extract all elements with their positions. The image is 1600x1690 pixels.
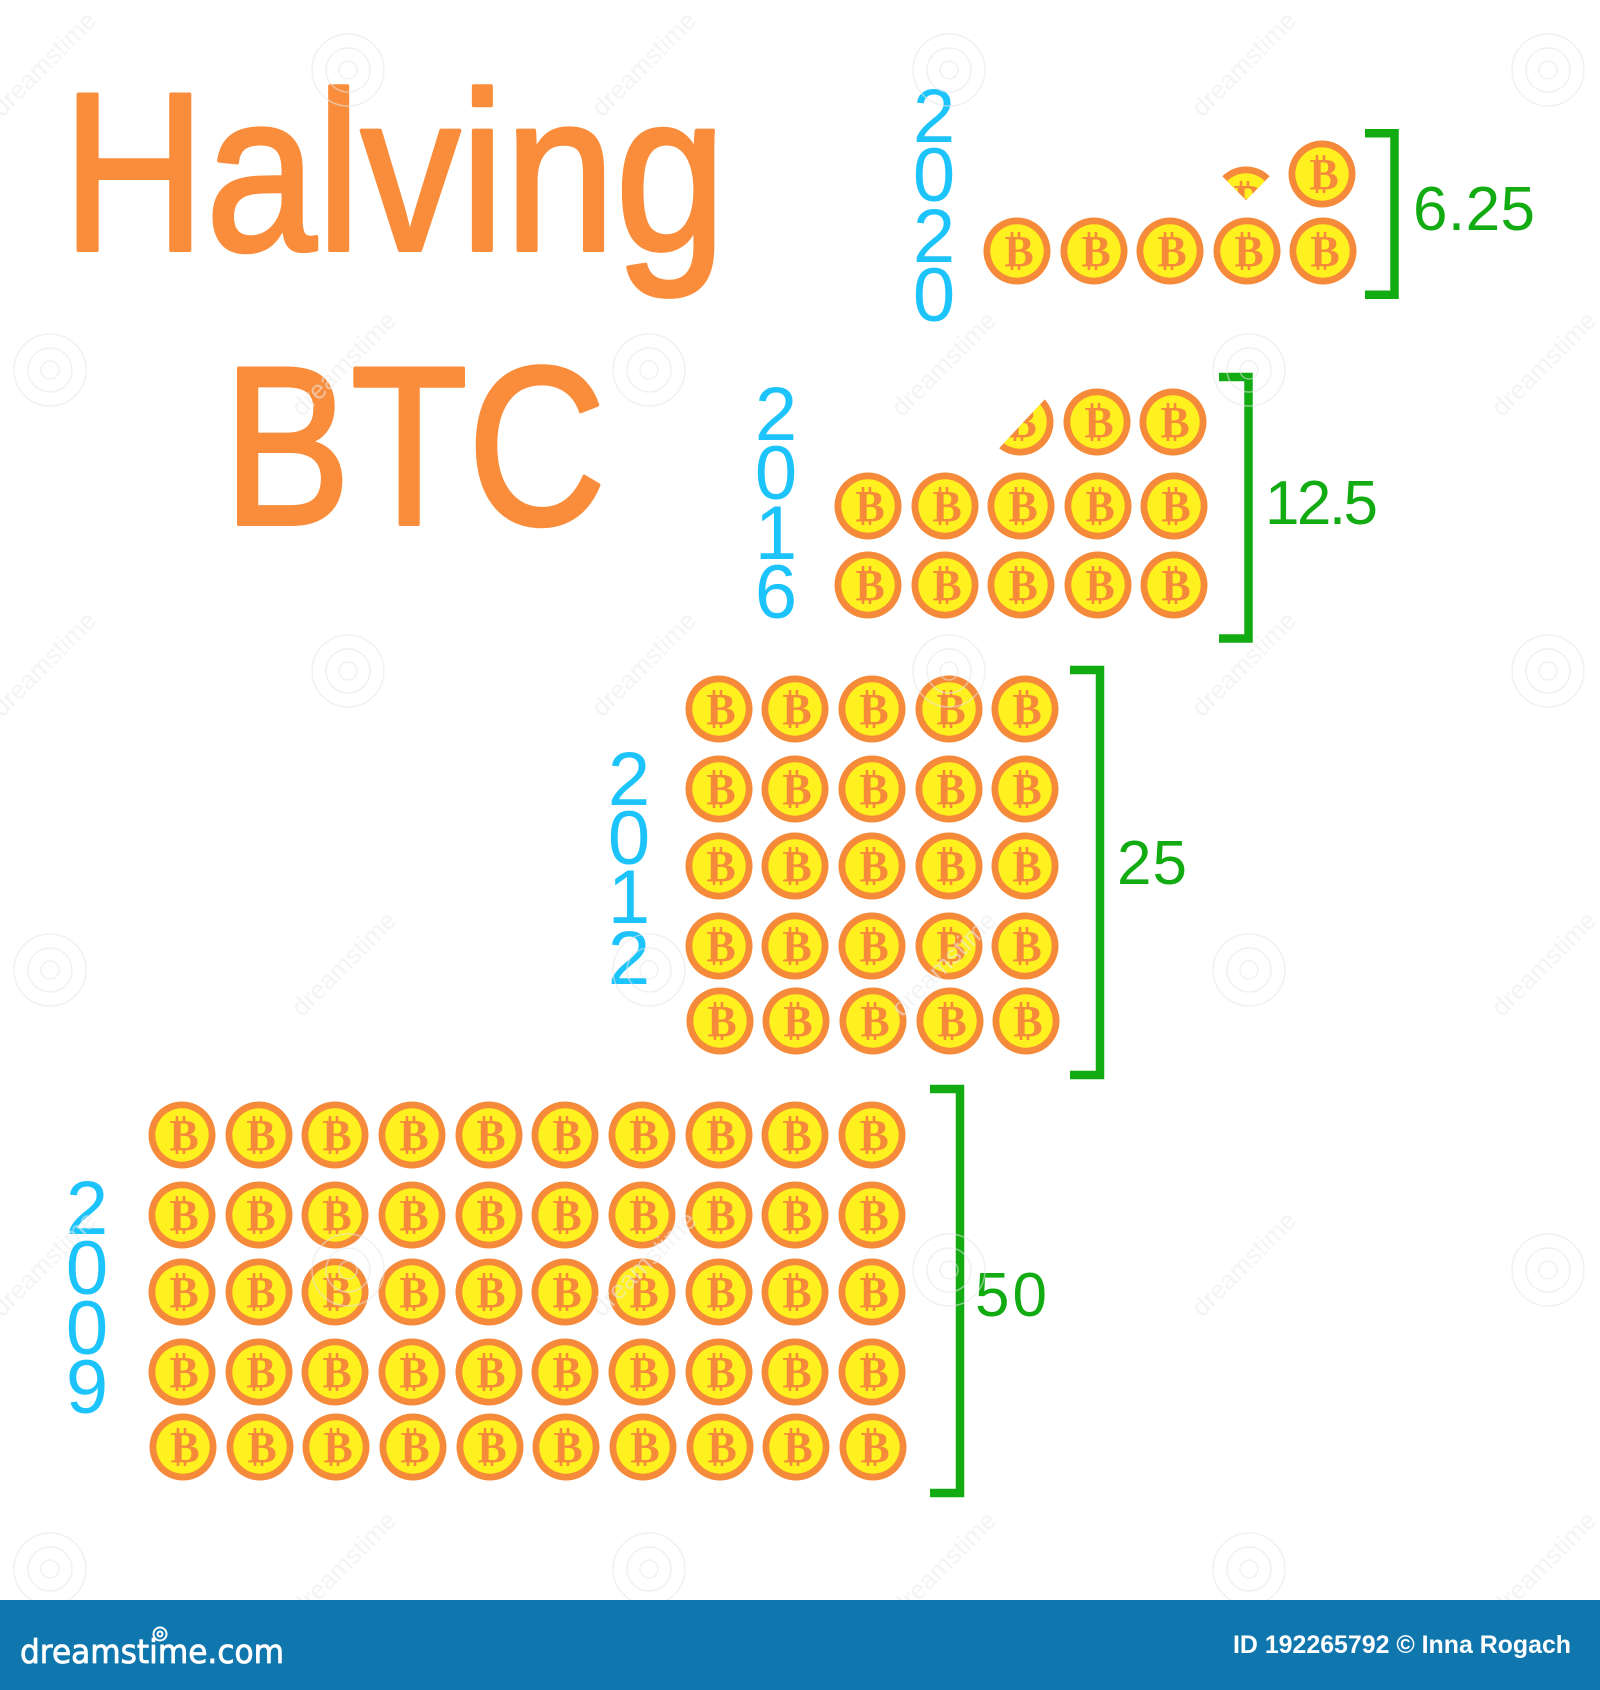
coin row 1: B: [399, 1111, 429, 1160]
top row coins with half coin: B: [1160, 398, 1190, 447]
coin row 3: B: [706, 1268, 736, 1317]
bottom row coins: B: [1008, 561, 1038, 610]
year label 2009: 9: [66, 1345, 108, 1430]
watermark layer: dreamstime: [585, 605, 702, 722]
icon: logo spiral: [154, 1628, 166, 1640]
year label 2012: [608, 737, 650, 1001]
coin row 2: B: [629, 1191, 659, 1240]
watermark layer: dreamstime: [1485, 905, 1600, 1022]
coin row 5: B: [783, 997, 813, 1046]
coin row 5: B: [247, 1423, 277, 1472]
coin row 2: B: [859, 765, 889, 814]
coin row 2: B: [1012, 765, 1042, 814]
coin row 1: B: [782, 685, 812, 734]
year label 2020: 0: [913, 133, 955, 218]
coin row 5: [686, 988, 1060, 1054]
coin row 4: B: [322, 1348, 352, 1397]
watermark layer: dreamstime: [1485, 305, 1600, 422]
footer bar: [0, 1600, 1600, 1690]
panel: 2016 halving: [755, 372, 1378, 638]
coin row 4: B: [246, 1348, 276, 1397]
coin row 5: B: [170, 1423, 200, 1472]
coin row 4: [686, 912, 1058, 980]
bottom row coins: [834, 552, 1208, 618]
coin row 2: B: [399, 1191, 429, 1240]
year label 2012: 2: [608, 737, 650, 822]
top row coins with quarter wedge: B: [1233, 176, 1263, 225]
bracket 2009: [930, 1089, 960, 1493]
coin row 5: B: [553, 1423, 583, 1472]
watermark layer: dreamstime: [1185, 1205, 1302, 1322]
coin row 2: B: [322, 1191, 352, 1240]
top row coins with quarter wedge: B: [1309, 150, 1339, 199]
bottom row coins: B: [1161, 561, 1191, 610]
coin row 4: B: [782, 922, 812, 971]
year label 2016: 6: [755, 550, 797, 635]
bottom row coins: B: [1004, 227, 1034, 276]
coin row 4: B: [936, 922, 966, 971]
coin row 2: B: [782, 1191, 812, 1240]
panel: 2009 halving: [66, 1089, 1047, 1493]
coin row 1: B: [629, 1111, 659, 1160]
year label 2020: 0: [913, 253, 955, 338]
year label 2009: [66, 1166, 108, 1430]
bracket 2016: [1219, 377, 1248, 638]
coin row 1: B: [246, 1111, 276, 1160]
coin row 4: B: [169, 1348, 199, 1397]
middle row coins: B: [1161, 482, 1191, 531]
coin row 3: B: [859, 1268, 889, 1317]
bottom row coins: B: [855, 561, 885, 610]
coin row 2: B: [782, 765, 812, 814]
coin row 3: B: [629, 1268, 659, 1317]
coin row 3: B: [936, 842, 966, 891]
coin row 3: B: [859, 842, 889, 891]
coin row 1: B: [322, 1111, 352, 1160]
watermark layer: dreamstime: [285, 1505, 402, 1622]
year label 2016: 1: [755, 491, 797, 576]
watermark layer: dreamstime: [885, 1505, 1002, 1622]
watermark layer: dreamstime: [1485, 1505, 1600, 1622]
coin row 2: B: [476, 1191, 506, 1240]
coin row 4: B: [859, 1348, 889, 1397]
coin row 4: B: [706, 922, 736, 971]
coin row 2: B: [552, 1191, 582, 1240]
coin row 1: B: [169, 1111, 199, 1160]
top row coins with half coin: [986, 388, 1206, 456]
watermark layer: dreamstime: [1185, 605, 1302, 722]
coin row 4: B: [782, 1348, 812, 1397]
coin row 5: B: [400, 1423, 430, 1472]
coin row 3: B: [782, 842, 812, 891]
watermark layer: dreamstime: [285, 305, 402, 422]
coin row 3: [686, 832, 1058, 900]
year label 2016: 0: [755, 431, 797, 516]
year label 2012: 1: [608, 855, 650, 940]
watermark layer: dreamstime: [585, 5, 702, 122]
watermark layer: dreamstime: [285, 905, 402, 1022]
coin row 4: B: [859, 922, 889, 971]
coin row 2: [686, 756, 1058, 822]
footer logo: dreamstime.com: dreamstime.com: [20, 1632, 284, 1671]
bracket 2012: [1070, 670, 1100, 1075]
coin row 3: B: [706, 842, 736, 891]
coin row 1: B: [706, 1111, 736, 1160]
watermark layer: dreamstime: [885, 905, 1002, 1022]
bottom row coins: B: [932, 561, 962, 610]
coin row 5: B: [1013, 997, 1043, 1046]
coin row 3: B: [322, 1268, 352, 1317]
bracket 2020: [1365, 133, 1394, 295]
coin row 5: B: [707, 997, 737, 1046]
top row coins with half coin: B: [1007, 398, 1037, 447]
middle row coins: B: [1008, 482, 1038, 531]
value 25: 25: [1117, 829, 1187, 898]
coin row 2: B: [936, 765, 966, 814]
coin row 2: B: [706, 1191, 736, 1240]
panel: 2012 halving: [608, 670, 1187, 1075]
year label 2020: 2: [913, 194, 955, 279]
coin row 5: B: [937, 997, 967, 1046]
coin row 3: B: [782, 1268, 812, 1317]
middle row coins: B: [1085, 482, 1115, 531]
value 6.25: 6.25: [1413, 175, 1535, 244]
top row coins with quarter wedge: [1222, 140, 1356, 208]
coin row 2: B: [169, 1191, 199, 1240]
watermark layer: dreamstime: [585, 1205, 702, 1322]
coin row 4: B: [1012, 922, 1042, 971]
coin row 3: B: [246, 1268, 276, 1317]
bottom row coins: B: [1157, 227, 1187, 276]
watermark layer: dreamstime: [885, 305, 1002, 422]
year label 2016: 2: [755, 372, 797, 457]
coin row 1: B: [1012, 685, 1042, 734]
coin row 3: B: [1012, 842, 1042, 891]
footer credit: ID 192265792 © Inna Rogach: [1233, 1631, 1571, 1659]
coin row 5: B: [860, 997, 890, 1046]
coin row 1: B: [782, 1111, 812, 1160]
middle row coins: [834, 472, 1208, 540]
coin row 1: B: [859, 1111, 889, 1160]
middle row coins: B: [932, 482, 962, 531]
year label 2012: 0: [608, 796, 650, 881]
bottom row coins: B: [1310, 227, 1340, 276]
year label 2012: 2: [608, 916, 650, 1001]
bottom row coins: [984, 218, 1356, 284]
coin row 1: B: [552, 1111, 582, 1160]
coin row 4: B: [706, 1348, 736, 1397]
coin row 1: B: [706, 685, 736, 734]
year label 2009: 2: [66, 1166, 108, 1251]
coin row 1: [686, 676, 1058, 742]
coin row 3: [148, 1258, 906, 1326]
bottom row coins: B: [1085, 561, 1115, 610]
year label 2009: 0: [66, 1286, 108, 1371]
coin row 4: B: [476, 1348, 506, 1397]
value 50: 50: [975, 1261, 1047, 1330]
coin row 4: B: [552, 1348, 582, 1397]
coin row 3: B: [552, 1268, 582, 1317]
coin row 5: B: [707, 1423, 737, 1472]
year label 2016: [755, 372, 797, 635]
coin row 2: B: [246, 1191, 276, 1240]
coin row 2: B: [706, 765, 736, 814]
coin row 1: B: [859, 685, 889, 734]
year label 2020: [913, 74, 955, 338]
coin row 5: B: [323, 1423, 353, 1472]
title: Halving: Halving: [62, 45, 726, 298]
title: BTC: BTC: [223, 319, 606, 572]
coin row 5: B: [783, 1423, 813, 1472]
coin row 3: B: [476, 1268, 506, 1317]
middle row coins: B: [855, 482, 885, 531]
watermark layer: dreamstime: [1185, 5, 1302, 122]
bottom row coins: B: [1081, 227, 1111, 276]
coin row 3: B: [399, 1268, 429, 1317]
top row coins with half coin: B: [1084, 398, 1114, 447]
coin row 5: [150, 1414, 906, 1480]
year label 2020: 2: [913, 74, 955, 159]
coin row 5: B: [860, 1423, 890, 1472]
coin row 5: B: [477, 1423, 507, 1472]
value 12.5: 12.5: [1265, 469, 1378, 538]
year label 2009: 0: [66, 1226, 108, 1311]
coin row 1: B: [936, 685, 966, 734]
coin row 3: B: [169, 1268, 199, 1317]
panel: 2020 halving: [913, 74, 1535, 338]
bottom row coins: B: [1234, 227, 1264, 276]
coin row 1: [148, 1102, 906, 1168]
coin row 2: B: [859, 1191, 889, 1240]
coin row 2: [148, 1182, 906, 1248]
coin row 4: B: [399, 1348, 429, 1397]
coin row 4: B: [629, 1348, 659, 1397]
coin row 5: B: [630, 1423, 660, 1472]
coin row 4: [148, 1338, 906, 1406]
coin row 1: B: [476, 1111, 506, 1160]
